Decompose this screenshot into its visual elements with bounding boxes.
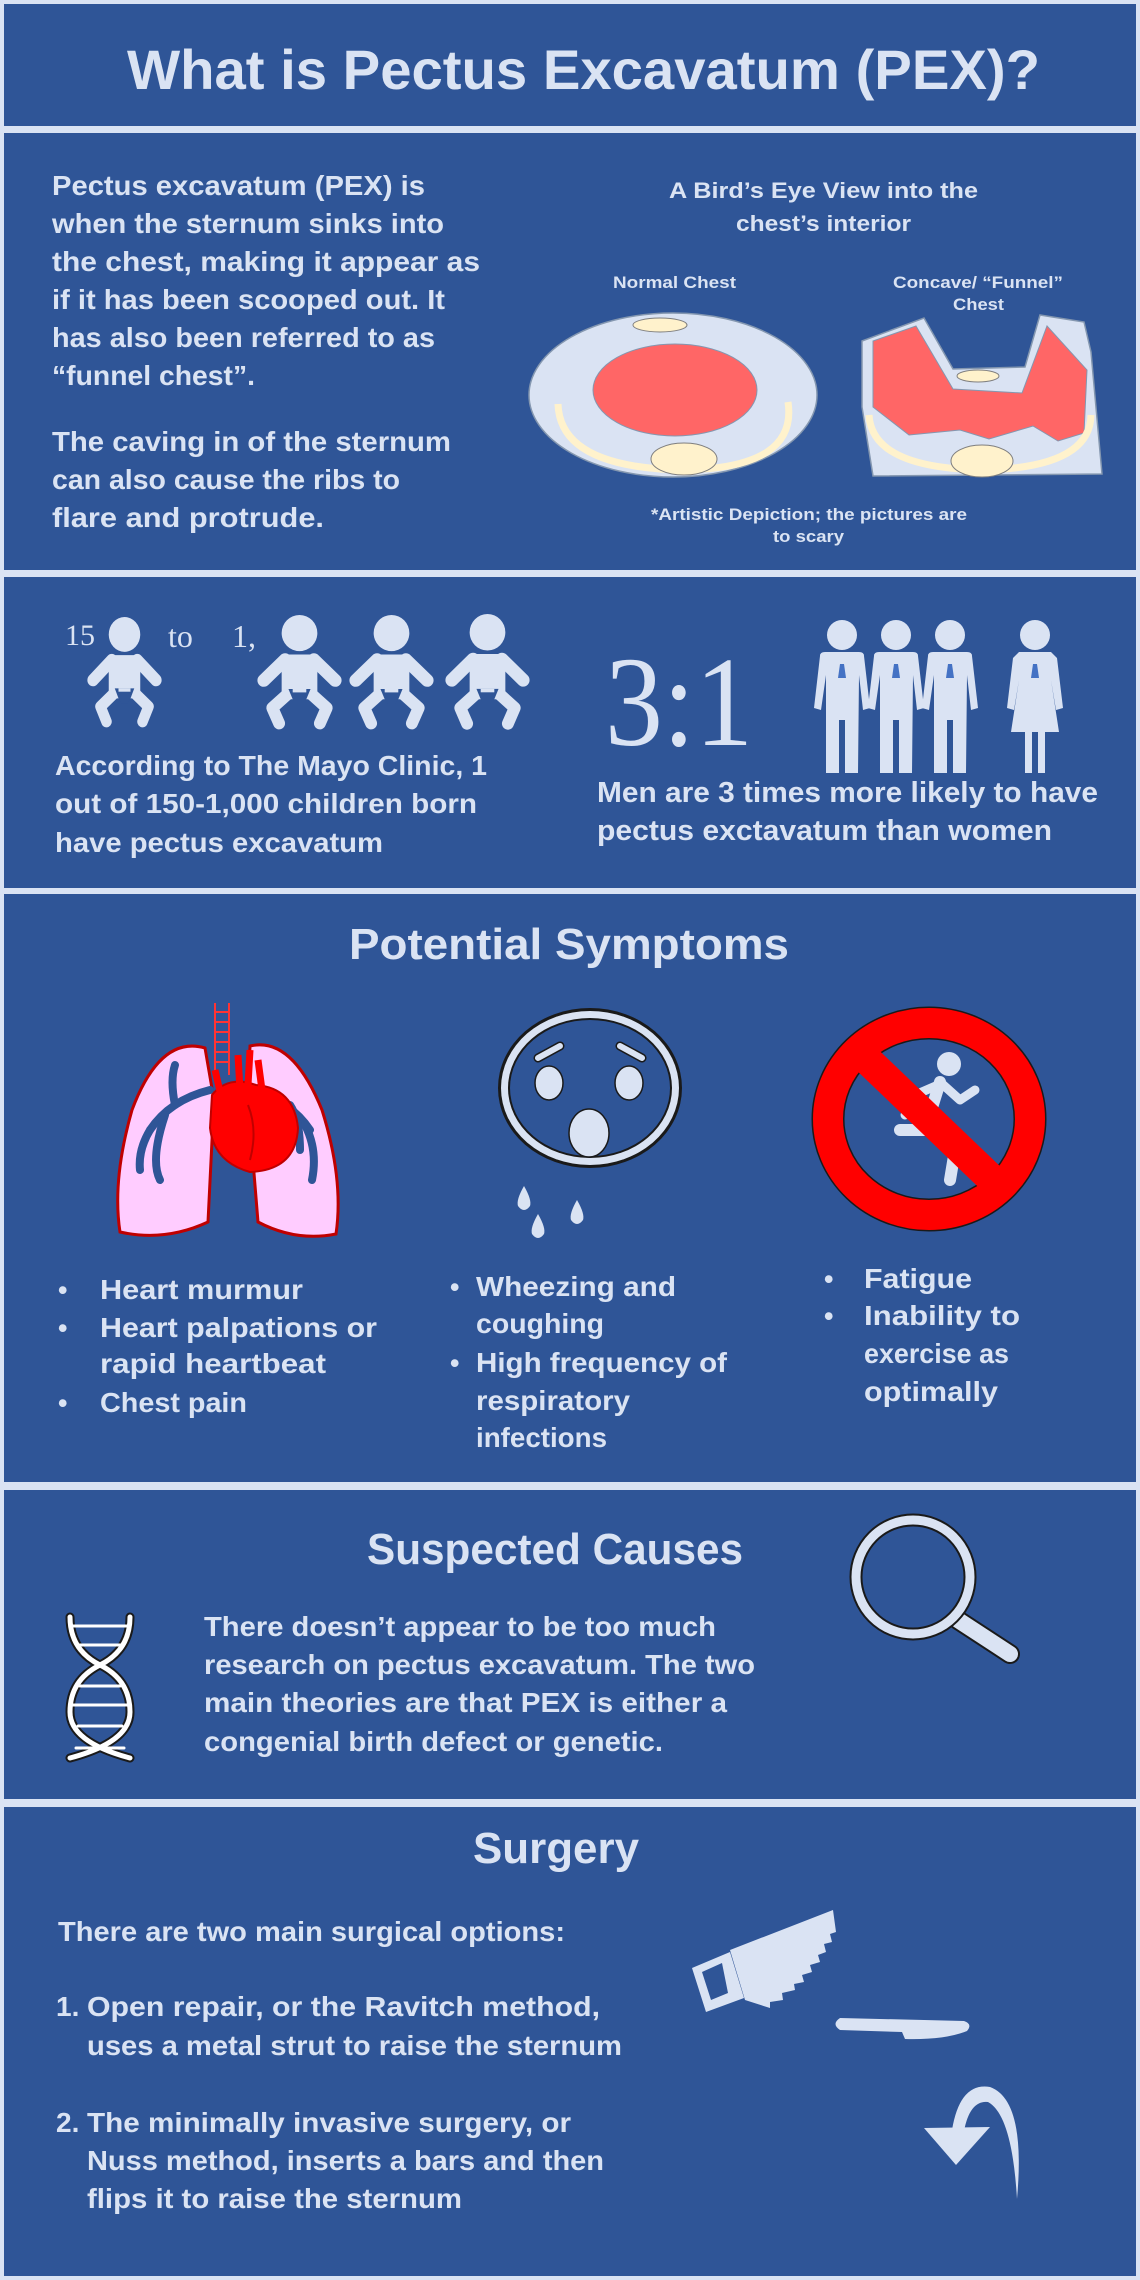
gender text: pectus exctavatum than women — [597, 815, 1052, 847]
option 2: flips it to raise the sternum — [87, 2183, 462, 2214]
symptoms list: heart: • — [58, 1275, 67, 1305]
ribs text — [52, 426, 451, 533]
definition text: has also been referred to as — [52, 322, 435, 353]
illustration: funnel chest — [862, 315, 1102, 477]
symptoms list: heart: Chest pain — [100, 1387, 247, 1418]
symptoms list: breathing: • — [450, 1348, 459, 1378]
icon: lungs and heart — [118, 1003, 338, 1236]
symptoms list: heart: • — [58, 1313, 67, 1343]
icon: no exercise sign — [828, 1023, 1030, 1215]
symptoms list: breathing: coughing — [476, 1308, 604, 1339]
bird's eye heading — [669, 178, 978, 236]
causes text: research on pectus excavatum. The two — [204, 1649, 755, 1680]
symptoms list: breathing: • — [450, 1272, 459, 1302]
symptoms list: heart: rapid heartbeat — [100, 1348, 326, 1379]
symptoms list: fatigue: • — [824, 1301, 833, 1331]
icon: knife — [836, 2018, 969, 2039]
option 2: The minimally invasive surgery, or — [87, 2107, 571, 2138]
icon: men and woman — [814, 620, 1063, 773]
label: funnel chest — [893, 273, 1063, 314]
icon: scared face — [498, 1008, 682, 1168]
symptoms list: fatigue — [824, 1263, 1020, 1407]
causes text: main theories are that PEX is either a — [204, 1687, 727, 1718]
symptoms list: fatigue: optimally — [864, 1376, 998, 1407]
panel: suspected causes — [4, 1490, 1136, 1799]
option 1: Open repair, or the Ravitch method, — [87, 1991, 600, 2022]
icon: drops — [518, 1186, 583, 1238]
heading: potential symptoms: Potential Symptoms — [349, 920, 789, 969]
symptoms list: breathing: High frequency of — [476, 1347, 728, 1378]
symptoms list: breathing — [450, 1271, 728, 1453]
definition text: if it has been scooped out. It — [52, 284, 445, 315]
icon: saw — [692, 1910, 836, 2012]
icon: flip arrow — [924, 2087, 1019, 2199]
panel: title — [4, 4, 1136, 126]
definition text: when the sternum sinks into — [51, 208, 444, 239]
panel: surgery — [4, 1807, 1136, 2276]
footnote: *Artistic Depiction; the pictures are — [651, 505, 967, 524]
ribs text: can also cause the ribs to — [52, 464, 400, 495]
symptoms list: fatigue: Fatigue — [864, 1263, 972, 1294]
big ratio 3:1: 3:1 — [605, 631, 753, 773]
option 2 — [56, 2107, 604, 2214]
option 1: uses a metal strut to raise the sternum — [87, 2030, 622, 2061]
causes text — [204, 1611, 755, 1757]
symptoms list: heart: Heart palpations or — [100, 1312, 377, 1343]
symptoms list: fatigue: exercise as — [864, 1338, 1009, 1369]
label: funnel chest: Concave/ “Funnel” — [893, 273, 1063, 292]
icon: babies — [93, 614, 523, 724]
illustration: normal chest — [529, 313, 817, 477]
mayo clinic text: According to The Mayo Clinic, 1 — [55, 750, 487, 781]
symptoms list: breathing: respiratory — [476, 1385, 630, 1416]
definition text — [51, 170, 480, 391]
heading: surgery: Surgery — [473, 1824, 640, 1873]
symptoms list: heart — [58, 1274, 377, 1418]
icon: DNA — [70, 1617, 130, 1758]
causes text: congenial birth defect or genetic. — [204, 1726, 663, 1757]
symptoms list: breathing: Wheezing and — [476, 1271, 676, 1302]
footnote: to scary — [773, 527, 845, 546]
gender text: Men are 3 times more likely to have — [597, 777, 1098, 809]
option 2: 2. — [56, 2107, 79, 2138]
mayo clinic text — [55, 750, 487, 858]
ribs text: flare and protrude. — [52, 502, 324, 533]
symptoms list: breathing: infections — [476, 1422, 607, 1453]
ribs text: The caving in of the sternum — [52, 426, 451, 457]
causes text: There doesn’t appear to be too much — [204, 1611, 716, 1642]
option 1: 1. — [56, 1991, 79, 2022]
heading: suspected causes: Suspected Causes — [367, 1525, 743, 1574]
bird's eye heading: A Bird’s Eye View into the — [669, 178, 978, 203]
option 1 — [56, 1991, 622, 2061]
panel: definition — [4, 133, 1136, 570]
symptoms list: heart: • — [58, 1388, 67, 1418]
surgery intro: There are two main surgical options: — [58, 1916, 565, 1947]
footnote — [651, 505, 967, 546]
symptoms list: heart: Heart murmur — [100, 1274, 303, 1305]
option 2: Nuss method, inserts a bars and then — [87, 2145, 604, 2176]
definition text: “funnel chest”. — [52, 360, 255, 391]
bird's eye heading: chest’s interior — [736, 211, 911, 236]
definition text: Pectus excavatum (PEX) is — [52, 170, 425, 201]
panel: potential symptoms — [4, 894, 1136, 1482]
ratio numbers text — [65, 618, 256, 654]
symptoms list: fatigue: • — [824, 1264, 833, 1294]
mayo clinic text: out of 150-1,000 children born — [55, 788, 477, 819]
label: funnel chest: Chest — [953, 295, 1004, 314]
panel: statistics — [4, 577, 1136, 888]
icon: magnifying glass — [856, 1520, 1010, 1654]
gender text — [597, 777, 1098, 847]
ratio numbers text: 1, — [232, 618, 256, 654]
symptoms list: fatigue: Inability to — [864, 1300, 1020, 1331]
definition text: the chest, making it appear as — [52, 246, 480, 277]
ratio numbers text: to — [168, 618, 193, 654]
mayo clinic text: have pectus excavatum — [55, 827, 383, 858]
label: normal chest: Normal Chest — [613, 273, 736, 292]
title: What is Pectus Excavatum (PEX)? — [127, 38, 1040, 101]
ratio numbers text: 15 — [65, 619, 95, 652]
